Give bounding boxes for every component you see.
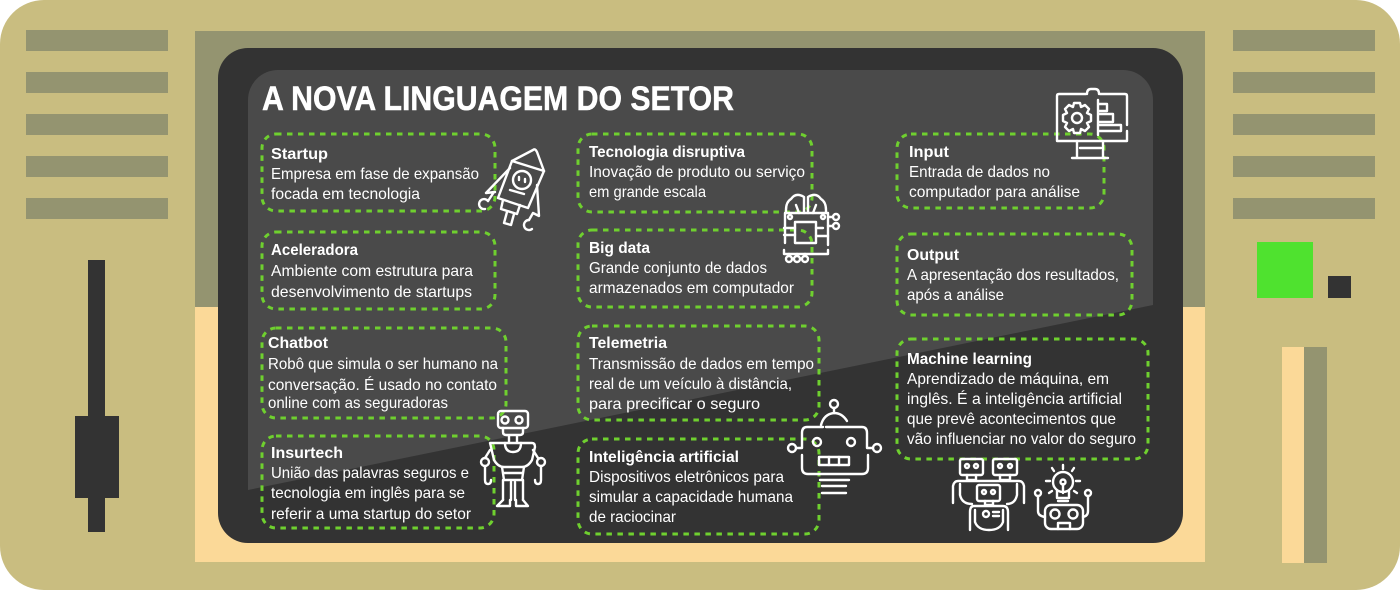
term: Chatbot: Chatbot (268, 335, 329, 352)
term: Output: A apresentação dos resultados, (907, 267, 1119, 284)
term: Inteligência artificial: Dispositivos eletrônicos para (589, 469, 784, 486)
term: Chatbot: online com as seguradoras (268, 395, 448, 412)
term: Startup: Empresa em fase de expansão (271, 166, 479, 183)
term: Inteligência artificial: Inteligência artificial (589, 449, 739, 466)
term: Output: Output (907, 247, 960, 264)
term: Machine learning (897, 339, 1148, 459)
term: Aceleradora: Ambiente com estrutura para (271, 263, 473, 280)
dark button (1328, 276, 1351, 298)
term: Input: computador para análise (909, 184, 1080, 201)
term: Tecnologia disruptiva: Inovação de produto ou serviço (589, 164, 805, 181)
term: Startup: focada em tecnologia (271, 186, 420, 203)
term: Machine learning: que prevê acontecimentos que (907, 411, 1116, 428)
term: Aceleradora: desenvolvimento de startups (271, 284, 472, 301)
term: Insurtech: tecnologia em inglês para se (271, 485, 465, 502)
icon: robot with light bulb (1035, 465, 1091, 529)
term: Insurtech: referir a uma startup do setor (271, 506, 472, 523)
term: Insurtech (262, 436, 494, 528)
term: Machine learning: Machine learning (907, 351, 1032, 368)
term: Big data: armazenados em computador (589, 280, 795, 297)
term: Inteligência artificial: de raciocinar (589, 509, 677, 526)
right striped bars (1282, 347, 1327, 563)
term: Telemetria: Telemetria (589, 335, 667, 352)
icon: three robots (953, 459, 1024, 530)
slider control (75, 260, 119, 532)
icon: monitor with gear (1057, 89, 1127, 158)
term: Input: Input (909, 144, 950, 161)
term: Machine learning: inglês. É a inteligência artificial (907, 389, 1122, 408)
term: Telemetria: real de um veículo à distância, (589, 376, 792, 393)
green indicator light (1257, 242, 1313, 298)
term: Big data: Grande conjunto de dados (589, 260, 767, 277)
term: Tecnologia disruptiva (578, 134, 812, 212)
screen surround (195, 31, 1205, 562)
term: Chatbot (262, 328, 506, 418)
term: Big data: Big data (589, 240, 650, 257)
term: Inteligência artificial: simular a capacidade humana (589, 489, 793, 506)
term: Output: após a análise (907, 287, 1004, 304)
term: Big data (578, 230, 812, 307)
right vents (1233, 30, 1375, 219)
term: Output (897, 234, 1132, 315)
term: Chatbot: Robô que simula o ser humano na (268, 356, 498, 373)
term: Telemetria: para precificar o seguro (589, 396, 760, 413)
term: Insurtech: Insurtech (271, 445, 343, 462)
term: Tecnologia disruptiva: em grande escala (589, 184, 706, 201)
term: Tecnologia disruptiva: Tecnologia disruptiva (589, 144, 745, 161)
term: Aceleradora: Aceleradora (271, 242, 358, 259)
term: Machine learning: vão influenciar no valor do seguro (907, 431, 1136, 448)
icon: chip with brain (784, 195, 839, 262)
term: Aceleradora (262, 232, 495, 309)
term: Machine learning: Aprendizado de máquina, em (907, 371, 1109, 388)
term: Chatbot: conversação. É usado no contato (268, 375, 497, 394)
term: Input: Entrada de dados no (909, 164, 1050, 181)
icon: chatbot robot (481, 411, 545, 506)
icon: rocket (479, 149, 544, 230)
term: Insurtech: União das palavras seguros e (271, 465, 469, 482)
title: A NOVA LINGUAGEM DO SETOR (262, 80, 734, 118)
left vents (26, 30, 168, 219)
term: Startup (262, 134, 495, 211)
term: Startup: Startup (271, 146, 328, 163)
term: Inteligência artificial (578, 439, 819, 534)
lighter screen reflection (248, 70, 1153, 490)
dark screen (218, 48, 1183, 543)
term: Input (897, 134, 1104, 208)
term: Telemetria (578, 326, 819, 420)
icon: AI robot head (788, 400, 881, 493)
term: Telemetria: Transmissão de dados em tempo (589, 356, 814, 373)
